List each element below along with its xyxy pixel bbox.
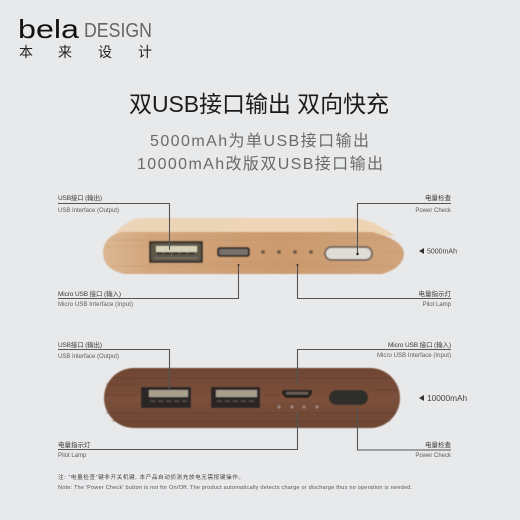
- footnote: Note: The 'Power Check' button is not for On/Off. The product automatically detects charge or discharge thus no operation is needed.: [58, 485, 412, 491]
- wood grain: [106, 238, 402, 266]
- callout: power check, top device: Power Check: [415, 208, 452, 214]
- walnut power bank 10000mAh: [104, 368, 400, 428]
- callout: micro USB input, top device: Micro USB 接口 (输入): [58, 289, 121, 298]
- callout: power check, bottom device: Power Check: [415, 453, 452, 459]
- callout: micro USB input, bottom device: Micro USB 接口 (输入): [388, 340, 451, 349]
- device front face: [103, 232, 404, 274]
- callout: pilot lamp, bottom device: 电量指示灯: [58, 440, 91, 449]
- logo: 计: [138, 44, 152, 60]
- device body: [104, 368, 400, 428]
- logo: 来: [58, 44, 72, 60]
- logo: DESIGN: [84, 20, 152, 42]
- callout: USB output, top device: USB Interface (Output): [58, 208, 119, 214]
- callout: pilot lamp, bottom device: [58, 411, 298, 459]
- LED indicators: [277, 405, 319, 409]
- subtitle: [137, 132, 383, 173]
- wood grain: [106, 378, 398, 421]
- logo: 设: [98, 44, 112, 60]
- device top surface: [114, 218, 396, 236]
- callout: power check, bottom device: [358, 405, 452, 459]
- callout: pilot lamp, top device: Pilot Lamp: [423, 302, 452, 308]
- callout: pilot lamp, top device: 电量指示灯: [418, 289, 452, 298]
- callout: pilot lamp, bottom device: Pilot Lamp: [58, 453, 87, 459]
- title: 双USB接口输出 双向快充: [129, 91, 389, 117]
- callout: micro USB input, bottom device: [298, 340, 451, 385]
- callout: pilot lamp, top device: [296, 264, 452, 308]
- callout: micro USB input, bottom device: Micro USB Interface (Input): [377, 353, 451, 359]
- micro USB port: [217, 247, 250, 257]
- callout: USB output, bottom device: USB接口 (输出): [58, 340, 102, 349]
- footnote: 注: “电量检查”键非开关机键, 本产品自动侦测充放电无需按键操作。: [58, 473, 244, 481]
- USB port 2: [211, 387, 260, 408]
- callout: USB output, bottom device: USB Interface (Output): [58, 354, 119, 360]
- USB port 1: [141, 387, 191, 408]
- callout: USB output, top device: USB接口 (输出): [58, 193, 102, 202]
- subtitle: 5000mAh为单USB接口输出: [150, 132, 369, 150]
- wooden power bank 5000mAh: [103, 218, 404, 274]
- micro USB port: [282, 390, 312, 398]
- callout: power check, top device: 电量检查: [425, 193, 452, 202]
- power check button: [329, 390, 368, 405]
- footnote: [58, 473, 412, 491]
- logo: 本: [19, 44, 33, 60]
- subtitle: 10000mAh改版双USB接口输出: [137, 155, 383, 173]
- LED indicators: [261, 250, 313, 254]
- logo: [18, 14, 152, 60]
- capacity label 5000mAh: 5000mAh: [427, 248, 457, 256]
- callout: micro USB input, top device: Micro USB Interface (Input): [58, 302, 133, 308]
- capacity label 10000mAh: 10000mAh: [427, 393, 468, 403]
- callout: micro USB input, top device: [58, 264, 240, 308]
- callout: USB output, bottom device: [58, 340, 170, 390]
- callout: power check, top device: [356, 193, 452, 255]
- power check button: [324, 246, 373, 261]
- USB port: [149, 241, 203, 263]
- callout: power check, bottom device: 电量检查: [425, 440, 452, 449]
- callout: USB output, top device: [58, 193, 170, 250]
- logo: bela: [18, 14, 80, 44]
